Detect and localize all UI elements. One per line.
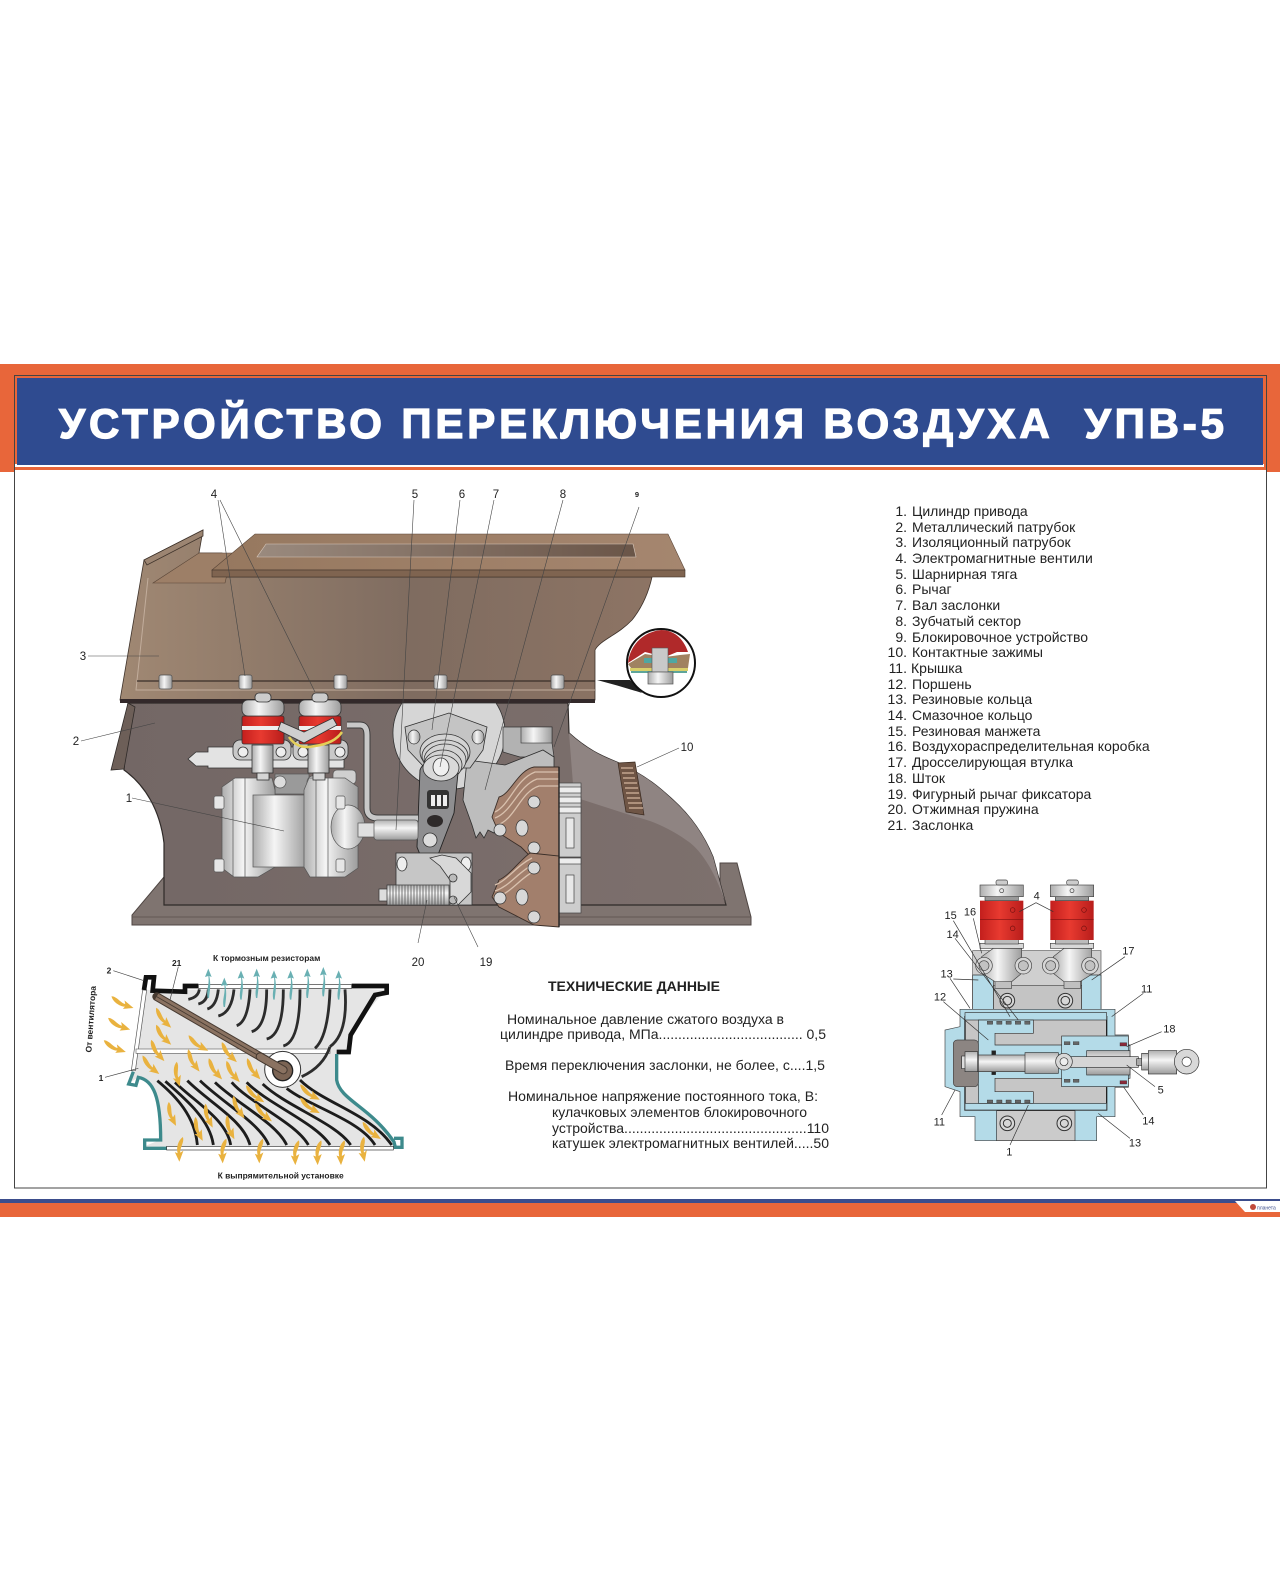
damper shaft (420, 734, 470, 780)
section labels: 14 (1142, 1116, 1154, 1128)
section labels: 11 (934, 1117, 945, 1129)
parts list: 10. (888, 644, 907, 660)
section labels: 16 (964, 907, 976, 919)
parts list: 12. (888, 676, 907, 692)
parts list: 16. (888, 738, 907, 754)
parts list: 2. (895, 519, 907, 535)
parts list: Заслонка (912, 817, 974, 833)
lower vanes (157, 1080, 392, 1145)
parts list: Шарнирная тяга (912, 566, 1018, 582)
parts list: Резиновая манжета (912, 723, 1041, 739)
inset: bolt connection (597, 629, 695, 697)
parts list: Отжимная пружина (912, 801, 1039, 817)
parts list: 9. (895, 629, 907, 645)
section labels: 17 (1122, 946, 1134, 958)
interlock: lower contact group (492, 853, 559, 927)
fixing bracket with latch 19 (396, 853, 472, 905)
parts list: Блокировочное устройство (912, 629, 1088, 645)
yellow wire (289, 732, 342, 747)
section labels: 11 (1141, 983, 1152, 995)
section labels: 13 (1129, 1137, 1141, 1149)
black upper wall (144, 977, 387, 1052)
shelf (153, 553, 232, 583)
top flange front (212, 570, 685, 577)
right valve (1042, 880, 1098, 988)
diagram labels: К выпрямительной установке (218, 1171, 344, 1181)
parts list: Металлический патрубок (912, 519, 1076, 535)
parts list: 1. (895, 503, 907, 519)
piston rod (962, 1049, 1199, 1075)
technical data text: Время переключения заслонки, не более, с....1,5 (505, 1058, 825, 1073)
top flange (212, 534, 685, 570)
section labels: 18 (1163, 1023, 1175, 1035)
parts list: Дросселирующая втулка (912, 754, 1073, 770)
yellow airflow arrows (101, 996, 384, 1165)
title banner: УСТРОЙСТВО ПЕРЕКЛЮЧЕНИЯ ВОЗДУХА УПВ-5 (59, 399, 1224, 447)
mounting plate (405, 713, 487, 768)
diagram labels: От вентилятора (83, 985, 98, 1053)
electromagnetic valve manifold (188, 747, 344, 768)
parts list: 3. (895, 534, 907, 550)
leader lines (81, 500, 679, 947)
part numbers: 8 (560, 489, 566, 501)
base plate seam (132, 916, 751, 918)
technical data heading: ТЕХНИЧЕСКИЕ ДАННЫЕ (548, 979, 720, 994)
part numbers: 9 (635, 490, 639, 499)
diagram labels: К тормозным резисторам (213, 953, 320, 963)
cylinder 1 (214, 770, 418, 877)
inner panel outline (136, 578, 595, 690)
mounting circles (997, 993, 1075, 1141)
part numbers (73, 489, 693, 969)
parts list: Шток (912, 770, 946, 786)
parts list: 18. (888, 770, 907, 786)
section labels: 4 (1034, 890, 1040, 902)
damper 21 (157, 997, 301, 1087)
toothed sector (463, 750, 554, 838)
parts list: Фигурный рычаг фиксатора (912, 786, 1092, 802)
solenoid valves 4 (233, 693, 348, 780)
parts list: Воздухораспределительная коробка (912, 738, 1150, 754)
interlock: upper contact group (492, 767, 559, 860)
section labels (934, 890, 1175, 1159)
part numbers: 4 (211, 489, 218, 501)
part numbers: 1 (126, 793, 132, 805)
cylinder cross-section diagram (934, 880, 1199, 1159)
dark band (120, 699, 595, 703)
section labels: 12 (934, 992, 946, 1004)
return spring 20 (379, 885, 449, 905)
piston (978, 1020, 1130, 1103)
publisher logo: планета (1257, 1206, 1276, 1212)
parts list: Зубчатый сектор (912, 613, 1021, 629)
parts list: 15. (888, 723, 907, 739)
parts list: Резиновые кольца (912, 691, 1032, 707)
diagram leader lines (105, 967, 178, 1077)
diagram labels: 1 (99, 1073, 104, 1083)
teal lower wall (129, 1054, 402, 1148)
big disc behind shaft (393, 703, 505, 789)
parts list: 4. (895, 550, 907, 566)
main illustration: air switch device (73, 489, 751, 969)
parts list: Электромагнитные вентили (912, 550, 1093, 566)
left brown edge (144, 530, 203, 565)
poster frame (0, 364, 1280, 1217)
lever 6 (417, 755, 459, 864)
right housing highlight (569, 733, 726, 905)
technical data text: Номинальное давление сжатого воздуха в (507, 1012, 784, 1027)
parts list: Поршень (912, 676, 972, 692)
diagram body fill (128, 988, 395, 1147)
top outlet strip (198, 985, 352, 988)
contact terminal plates (559, 783, 581, 913)
left flange strip (111, 703, 135, 770)
bottom outlet strip (167, 1146, 393, 1150)
main housing (945, 1009, 1128, 1141)
air pipe (347, 725, 418, 818)
inlet grid (131, 990, 147, 1071)
section labels: 13 (941, 968, 953, 980)
part numbers: 6 (459, 489, 465, 501)
technical data text: цилиндре привода, МПа..................................... 0,5 (500, 1027, 826, 1042)
part numbers: 19 (480, 957, 492, 969)
section labels: 5 (1158, 1084, 1164, 1096)
parts list: 7. (895, 597, 907, 613)
part numbers: 2 (73, 736, 79, 748)
parts list: Крышка (911, 660, 963, 676)
air pipe inner (347, 725, 418, 818)
insulating duct 3 (120, 530, 652, 700)
parts list: Рычаг (912, 581, 952, 597)
diagram labels: 21 (172, 958, 182, 968)
parts list: 6. (895, 581, 907, 597)
cylinder bottom wall (965, 1103, 1107, 1110)
contact clamps 10 (618, 762, 644, 815)
technical data text: кулачковых элементов блокировочного (552, 1105, 807, 1120)
upper bracket (503, 727, 554, 757)
parts list: 19. (888, 786, 907, 802)
parts list: Контактные зажимы (912, 644, 1043, 660)
cylinder top wall (965, 1013, 1107, 1020)
upper vanes (188, 989, 346, 1077)
parts list: Цилиндр привода (912, 503, 1028, 519)
bore (965, 1017, 1107, 1110)
seam line (137, 680, 595, 682)
technical data text (500, 1012, 829, 1151)
parts list: Изоляционный патрубок (912, 534, 1071, 550)
section labels: 15 (945, 910, 957, 922)
technical data (500, 979, 829, 1151)
part numbers: 5 (412, 489, 418, 501)
valve bracket (278, 718, 337, 743)
flange nuts (159, 675, 564, 689)
technical data text: устройства...............................................110 (552, 1121, 829, 1136)
parts list: 5. (895, 566, 907, 582)
parts list: 8. (895, 613, 907, 629)
gray housing: metallic duct 2 (124, 703, 726, 905)
part numbers: 10 (681, 742, 693, 754)
parts list: 21. (888, 817, 907, 833)
technical data text: Номинальное напряжение постоянного тока, В: (508, 1089, 818, 1104)
teal airflow arrows (205, 967, 342, 1007)
end cover cavity (953, 1040, 978, 1087)
base plate (132, 863, 751, 925)
part numbers: 7 (493, 489, 499, 501)
valve box block (973, 951, 1101, 1011)
publisher logo (1235, 1201, 1280, 1212)
parts list: Вал заслонки (912, 597, 1000, 613)
section labels: 14 (947, 929, 959, 941)
sealing rings (987, 1021, 1127, 1103)
parts list: 11. (889, 660, 907, 676)
lower block (993, 985, 1082, 1010)
airflow section diagram (83, 953, 402, 1181)
parts list (888, 503, 1150, 833)
parts list: 14. (888, 707, 907, 723)
parts list: 20. (888, 801, 907, 817)
title banner (17, 378, 1263, 465)
section leader lines (942, 903, 1162, 1145)
parts list: 13. (888, 691, 907, 707)
diagram labels (83, 953, 344, 1181)
technical data text: катушек электромагнитных вентилей.....50 (552, 1136, 829, 1151)
parts list: 17. (888, 754, 907, 770)
rod sleeve (1062, 1036, 1128, 1087)
left valve (976, 880, 1032, 988)
section labels: 1 (1006, 1147, 1012, 1159)
parts list: Смазочное кольцо (912, 707, 1033, 723)
part numbers: 3 (80, 651, 86, 663)
slot (257, 544, 636, 557)
mid divider (136, 1049, 330, 1053)
vertical contact divider (558, 767, 560, 927)
side blue channels (973, 975, 1101, 1015)
diagram labels: 2 (107, 965, 112, 975)
part numbers: 20 (412, 957, 424, 969)
